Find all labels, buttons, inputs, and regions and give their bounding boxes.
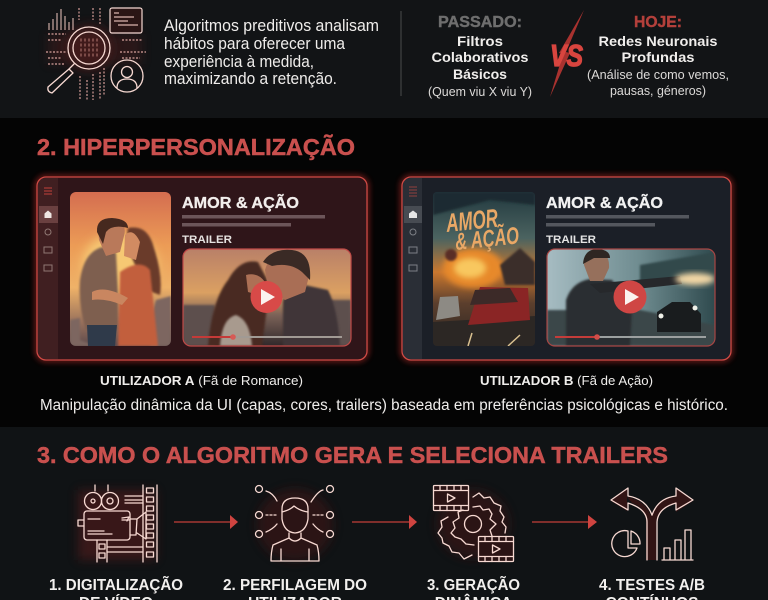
video: action trailer <box>547 249 715 346</box>
label: step 3 <box>427 576 520 600</box>
panel: today column <box>587 14 729 98</box>
arrow: step 1 to 2 <box>174 515 238 529</box>
poster: romance couple <box>70 192 171 346</box>
text: title and description bars: TRAILER <box>546 234 596 246</box>
panel border <box>402 177 731 360</box>
sidebar <box>38 178 58 359</box>
caption: dynamic UI manipulation: Manipulação dinâmica da UI (capas, cores, trailers) baseada em preferências psicológicas e histórico. <box>40 397 728 414</box>
text: intro description: hábitos para oferecer uma <box>164 35 346 53</box>
step 4: A/B tests <box>599 488 705 600</box>
text: today description: Profundas <box>622 49 695 65</box>
text: today description: pausas, géneros) <box>610 84 706 98</box>
text: intro description: Algoritmos preditivos analisam <box>164 17 379 35</box>
text: intro description: experiência à medida, <box>164 53 314 71</box>
text: past description: Colaborativos <box>432 49 529 65</box>
panel: past column <box>428 14 532 99</box>
icon: gears and film clips <box>434 486 514 562</box>
text: past description: Filtros <box>457 33 503 49</box>
label: step 4: 4. TESTES A/B <box>599 577 705 594</box>
arrow: step 2 to 3 <box>352 515 417 529</box>
label: today heading: HOJE: <box>634 14 682 31</box>
text: title and description bars <box>546 194 689 246</box>
step 3: dynamic generation <box>427 486 520 600</box>
label: step 1: 1. DIGITALIZAÇÃO <box>49 576 183 594</box>
panel: user B interface <box>402 177 731 360</box>
icon: versus mark <box>550 10 584 97</box>
panel border <box>37 177 367 360</box>
text: intro description <box>164 17 379 88</box>
icon: play button <box>250 281 282 313</box>
text: today description: (Análise de como vemos, <box>587 68 729 82</box>
icon: film camera <box>78 485 157 562</box>
poster: action movie <box>433 192 535 346</box>
step 1: video scan <box>49 485 183 600</box>
panel: user A interface <box>37 177 367 360</box>
icon: play button <box>614 280 646 314</box>
panel: predictive algorithms intro <box>46 8 379 100</box>
poster: action movie: AMOR <box>444 203 499 238</box>
heading: section 2: 2. HIPERPERSONALIZAÇÃO <box>37 133 355 160</box>
text: title and description bars: AMOR & AÇÃO <box>546 194 663 212</box>
heading: section 3: 3. COMO O ALGORITMO GERA E SELECIONA TRAILERS <box>37 442 668 468</box>
text: past description <box>428 33 532 99</box>
icon: magnifier analysing data <box>46 8 146 100</box>
label: step 1 <box>49 576 183 600</box>
label: past heading: PASSADO: <box>438 14 522 31</box>
sidebar <box>403 178 422 359</box>
icon: split arrows and charts <box>611 488 693 560</box>
label: user A: UTILIZADOR A (Fã de Romance) <box>100 373 303 388</box>
text: title and description bars: TRAILER <box>182 234 232 246</box>
text: title and description bars <box>182 194 325 246</box>
text: title and description bars: AMOR & AÇÃO <box>182 194 299 212</box>
icon: versus mark: VS <box>550 38 583 73</box>
arrow: step 3 to 4 <box>532 515 597 529</box>
text: past description: Básicos <box>453 66 507 82</box>
text: today description: Redes Neuronais <box>598 33 718 49</box>
label: step 2: 2. PERFILAGEM DO <box>223 577 367 594</box>
label: step 3: 3. GERAÇÃO <box>427 576 520 594</box>
text: intro description: maximizando a retenção. <box>164 70 337 88</box>
text: past description: (Quem viu X viu Y) <box>428 85 532 99</box>
divider <box>400 11 402 96</box>
text: today description <box>587 33 729 98</box>
poster: action movie: & AÇÃO <box>454 221 520 256</box>
label: user B: UTILIZADOR B (Fã de Ação) <box>480 373 653 388</box>
step 2: user profiling <box>223 486 367 600</box>
video: romance trailer <box>183 249 351 346</box>
progress bar <box>192 334 342 340</box>
icon: user profile with data nodes <box>256 486 334 561</box>
progress bar <box>555 334 706 340</box>
